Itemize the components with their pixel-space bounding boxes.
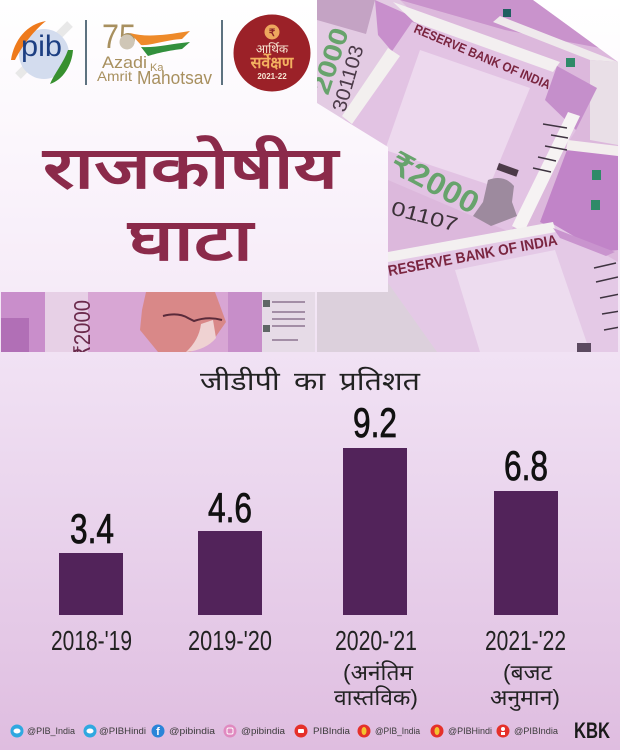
top pink note xyxy=(400,0,600,48)
bar: 2021-22: 6.8 xyxy=(504,442,548,489)
logo: Economic Survey badge: सर्वेक्षण xyxy=(250,53,295,72)
bar: 2020-21: (अनंतिम xyxy=(343,660,414,685)
bar chart xyxy=(51,399,566,711)
footer: social handles: PIBIndia xyxy=(313,726,350,736)
logo: PIB xyxy=(11,21,73,84)
bar: 2018-19: 3.4 xyxy=(70,505,114,552)
bar: 2020-21 xyxy=(334,399,418,710)
footer: social handles xyxy=(10,718,610,743)
photo: banknote collage: ₹2000 xyxy=(385,145,485,221)
icon: Facebook xyxy=(152,724,164,738)
upper note text: RESERVE BANK OF INDIA xyxy=(412,21,554,92)
footer: social handles: @PIBHindi xyxy=(448,726,492,736)
bar: 2019-20: 2019-'20 xyxy=(188,625,272,656)
logo: Economic Survey badge: आर्थिक xyxy=(256,42,289,56)
bar: 2021-22: 2021-'22 xyxy=(485,625,566,656)
bar: 2020-21: 9.2 xyxy=(353,399,397,446)
title: घाटा xyxy=(127,208,256,273)
bar: 2019-20 xyxy=(188,484,272,656)
photo: Gandhi banknote strip xyxy=(1,292,315,358)
title xyxy=(42,135,341,273)
title: राजकोषीय xyxy=(42,135,341,201)
icon: Instagram xyxy=(224,724,236,738)
bar: 2021-22: अनुमान) xyxy=(490,685,560,711)
photo: banknote collage xyxy=(305,0,620,352)
logo: Economic Survey badge: ₹ xyxy=(269,28,276,39)
credit: KBK: KBK xyxy=(574,718,610,743)
icon: ShareChat xyxy=(496,724,510,738)
icon: Koo xyxy=(358,724,370,738)
panel: title background xyxy=(0,0,388,292)
diagonal white margin xyxy=(512,112,580,232)
footer: social handles: @PIBHindi xyxy=(99,726,146,736)
footer: social handles: @PIB_India xyxy=(375,726,420,736)
chart subtitle: जीडीपी का प्रतिशत xyxy=(200,366,421,396)
divider xyxy=(221,20,223,85)
logo: Economic Survey badge xyxy=(234,14,310,92)
footer: social handles: @pibindia xyxy=(241,726,285,736)
bar: 2020-21: 2020-'21 xyxy=(335,625,417,656)
photo: banknote collage: RESERVE BANK OF INDIA xyxy=(387,232,559,280)
icon: Facebook: f xyxy=(156,726,160,738)
bar: 2018-19 xyxy=(51,505,132,656)
icon: Twitter xyxy=(10,724,24,738)
logo: Azadi Ka Amrit Mahotsav: Ka xyxy=(150,62,164,74)
bar: 2021-22: (बजट xyxy=(503,660,553,685)
photo: banknote collage: 2000 xyxy=(305,24,355,98)
logo: Azadi Ka Amrit Mahotsav: Azadi xyxy=(102,53,147,72)
icon: Koo Hindi xyxy=(430,724,444,738)
grey area below title xyxy=(317,280,437,352)
lower note xyxy=(388,224,618,352)
footer: social handles: @PIBIndia xyxy=(514,726,558,736)
purple patterned corner xyxy=(540,142,618,252)
footer: social handles: @pibindia xyxy=(169,726,215,736)
bar: 2021-22 xyxy=(485,442,566,711)
divider xyxy=(85,20,87,85)
logo: Economic Survey badge: 2021-22 xyxy=(257,72,287,81)
icon: YouTube xyxy=(294,724,308,738)
main note body xyxy=(345,22,595,232)
footer: social handles: @PIB_India xyxy=(27,726,75,736)
logo: Azadi Ka Amrit Mahotsav: Mahotsav xyxy=(137,68,212,88)
bar: 2020-21: वास्तविक) xyxy=(334,685,418,710)
photo: banknote collage: 301103 xyxy=(329,43,369,114)
bar: 2018-19: 2018-'19 xyxy=(51,625,132,656)
logo: Azadi Ka Amrit Mahotsav: 75 xyxy=(102,18,136,56)
upper right paper xyxy=(590,60,618,145)
top-left note xyxy=(317,0,406,120)
bar: 2019-20: 4.6 xyxy=(208,484,252,531)
icon: Twitter Hindi xyxy=(84,724,96,738)
Ashoka emblem xyxy=(473,178,517,226)
photo: banknote collage: 01107 xyxy=(389,198,460,236)
logo: PIB: pib xyxy=(21,30,62,63)
logo: Azadi Ka Amrit Mahotsav xyxy=(97,18,212,88)
logo: Azadi Ka Amrit Mahotsav: Amrit xyxy=(97,68,132,84)
photo: Gandhi banknote strip: ₹2000 xyxy=(69,300,95,358)
